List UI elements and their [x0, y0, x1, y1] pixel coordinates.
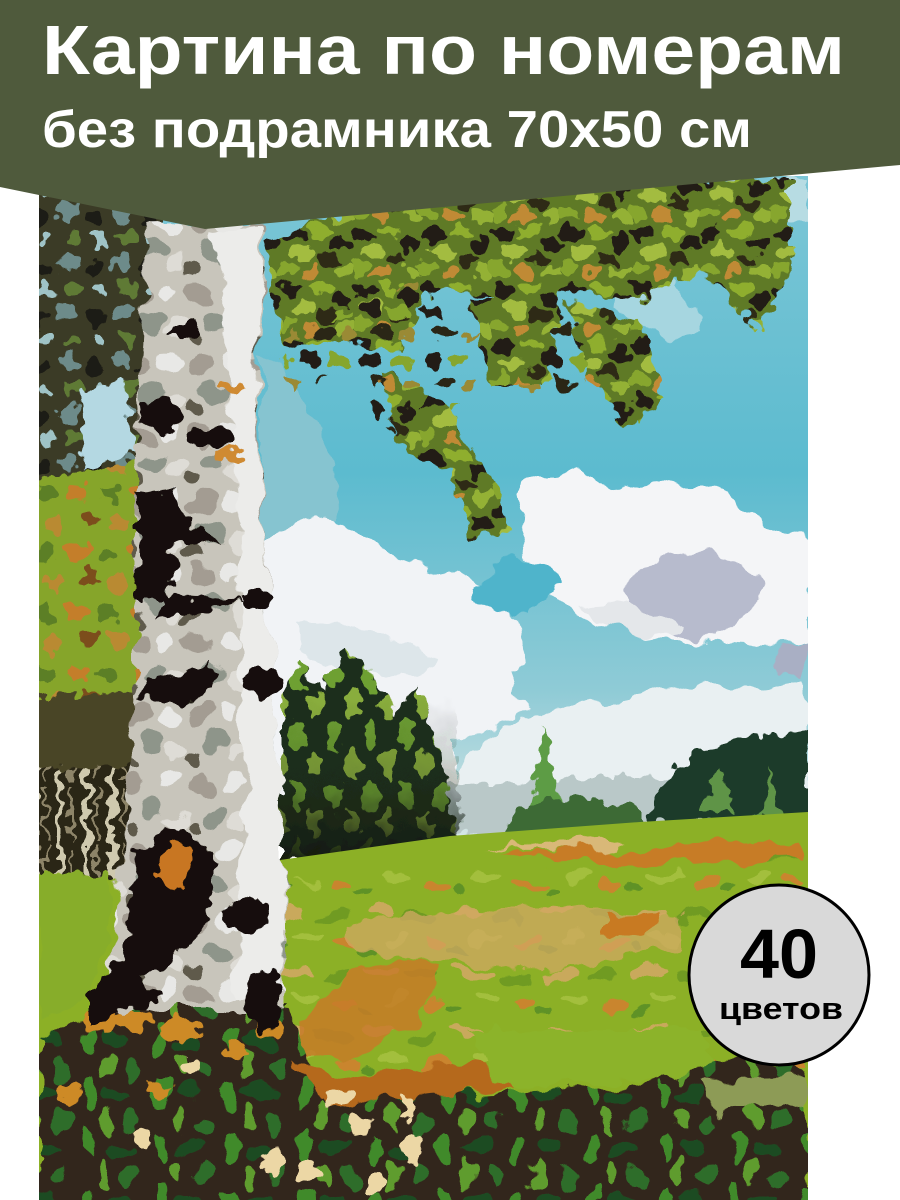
- birch trunk: [105, 222, 285, 1010]
- fallen leaves and daisies: [56, 1008, 424, 1196]
- middle forest: [280, 650, 460, 862]
- birch foliage canopy: [265, 176, 790, 540]
- meadow: [39, 812, 808, 1200]
- header banner: [0, 0, 900, 229]
- title: Картина по номерам: [42, 11, 845, 89]
- background left foliage: [30, 190, 160, 876]
- badge: number of colours: [689, 885, 869, 1065]
- badge: number of colours: цветов: [719, 991, 843, 1026]
- birch bark markings: [90, 322, 283, 1030]
- sky: [162, 176, 808, 836]
- subtitle: без подрамника 70х50 см: [42, 101, 752, 159]
- badge: number of colours: 40: [740, 915, 818, 993]
- painting: birch tree landscape: [30, 176, 808, 1200]
- foreground grass: [39, 1000, 808, 1200]
- distant tree line: [440, 725, 808, 845]
- clouds: [262, 176, 808, 810]
